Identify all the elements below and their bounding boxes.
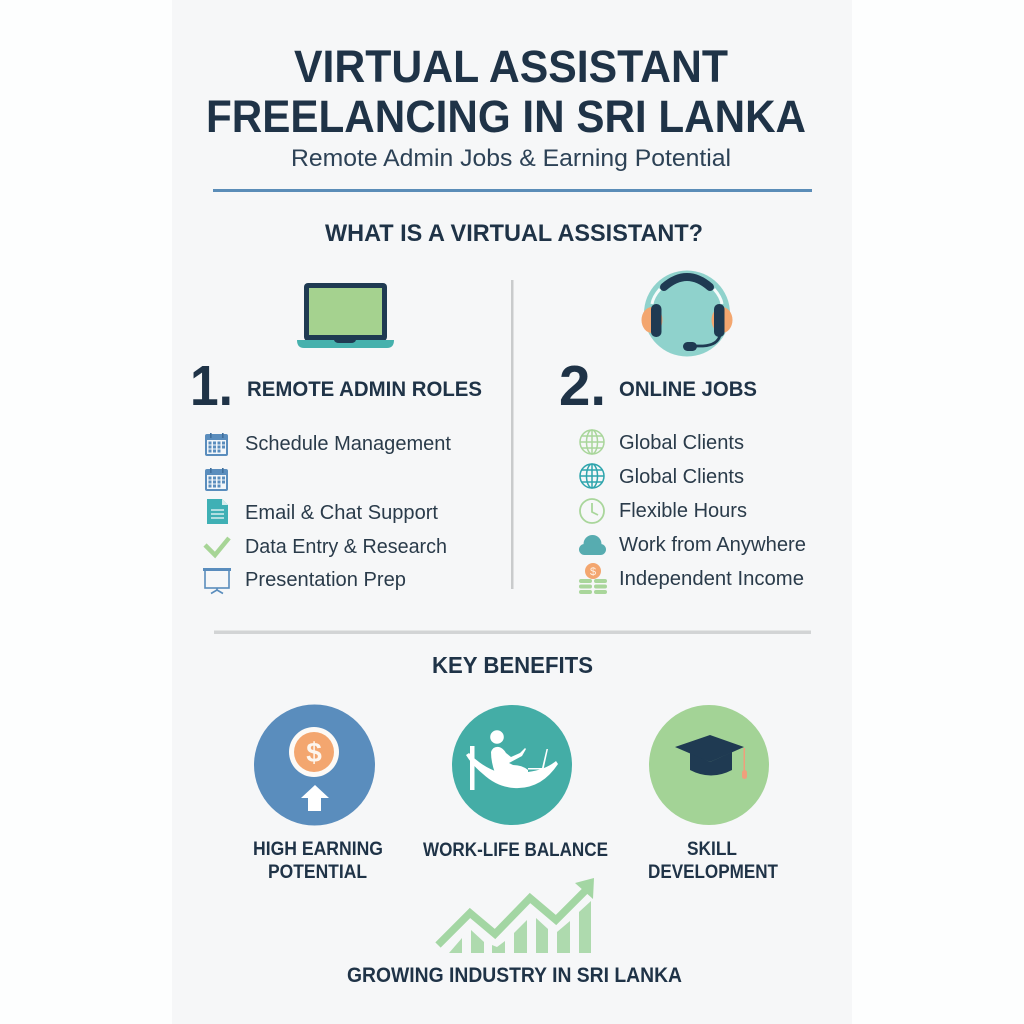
number 2: 2. <box>559 354 606 418</box>
icon: coins <box>579 563 607 594</box>
title <box>206 41 806 142</box>
icon: graduation cap <box>649 705 769 825</box>
label: work-life balance: WORK-LIFE BALANCE <box>423 839 608 861</box>
heading: online jobs: ONLINE JOBS <box>619 378 757 401</box>
icon: globe green <box>580 430 604 454</box>
heading: remote admin roles: REMOTE ADMIN ROLES <box>247 378 482 401</box>
item: presentation prep: Presentation Prep <box>245 569 406 591</box>
icon: calendar second <box>205 468 228 491</box>
number 1: 1. <box>190 354 233 418</box>
icon: calendar <box>205 433 228 456</box>
heading: what is a virtual assistant: WHAT IS A VIRTUAL ASSISTANT? <box>325 220 703 247</box>
item: global clients second: Global Clients <box>619 466 744 488</box>
item: global clients: Global Clients <box>619 432 744 454</box>
label: skill development: DEVELOPMENT <box>648 861 778 883</box>
label: high earning potential: HIGH EARNING <box>253 838 383 860</box>
chart: growth bars and arrow <box>438 878 594 953</box>
item: data entry and research: Data Entry & Research <box>245 536 447 558</box>
icon: person in hammock <box>452 705 572 825</box>
icon: coin and arrow: $ <box>306 737 322 768</box>
icon: clock <box>580 499 604 523</box>
icon: presentation board <box>203 570 231 594</box>
icon: document <box>207 499 228 524</box>
item: work from anywhere: Work from Anywhere <box>619 534 806 556</box>
icon: coins: $ <box>590 566 596 578</box>
item: schedule management: Schedule Management <box>245 433 451 455</box>
title: FREELANCING IN SRI LANKA <box>206 91 806 142</box>
icon: coin and arrow <box>254 704 375 826</box>
icon: headset <box>642 270 732 356</box>
icon: globe teal <box>580 464 604 488</box>
benefit: high earning potential <box>253 704 383 883</box>
item: flexible hours: Flexible Hours <box>619 500 747 522</box>
icon: check mark <box>205 538 229 555</box>
panel: online jobs <box>559 270 806 594</box>
benefit: skill development <box>648 705 778 883</box>
page panel <box>172 0 852 1024</box>
item: independent income: Independent Income <box>619 568 804 590</box>
label: high earning potential: POTENTIAL <box>268 861 367 883</box>
panel: remote admin roles <box>190 283 482 594</box>
label: skill development <box>648 838 778 883</box>
subtitle: Remote Admin Jobs & Earning Potential <box>291 145 731 172</box>
label: skill development: SKILL <box>687 838 737 860</box>
icon: laptop <box>297 283 394 348</box>
item: email and chat support: Email & Chat Support <box>245 502 438 524</box>
icon: cloud <box>579 535 606 555</box>
label: growing industry in sri lanka: GROWING INDUSTRY IN SRI LANKA <box>347 964 682 987</box>
title: VIRTUAL ASSISTANT <box>294 41 728 92</box>
benefit: work-life balance <box>423 705 608 861</box>
label: high earning potential <box>253 838 383 883</box>
heading: key benefits: KEY BENEFITS <box>432 652 593 678</box>
